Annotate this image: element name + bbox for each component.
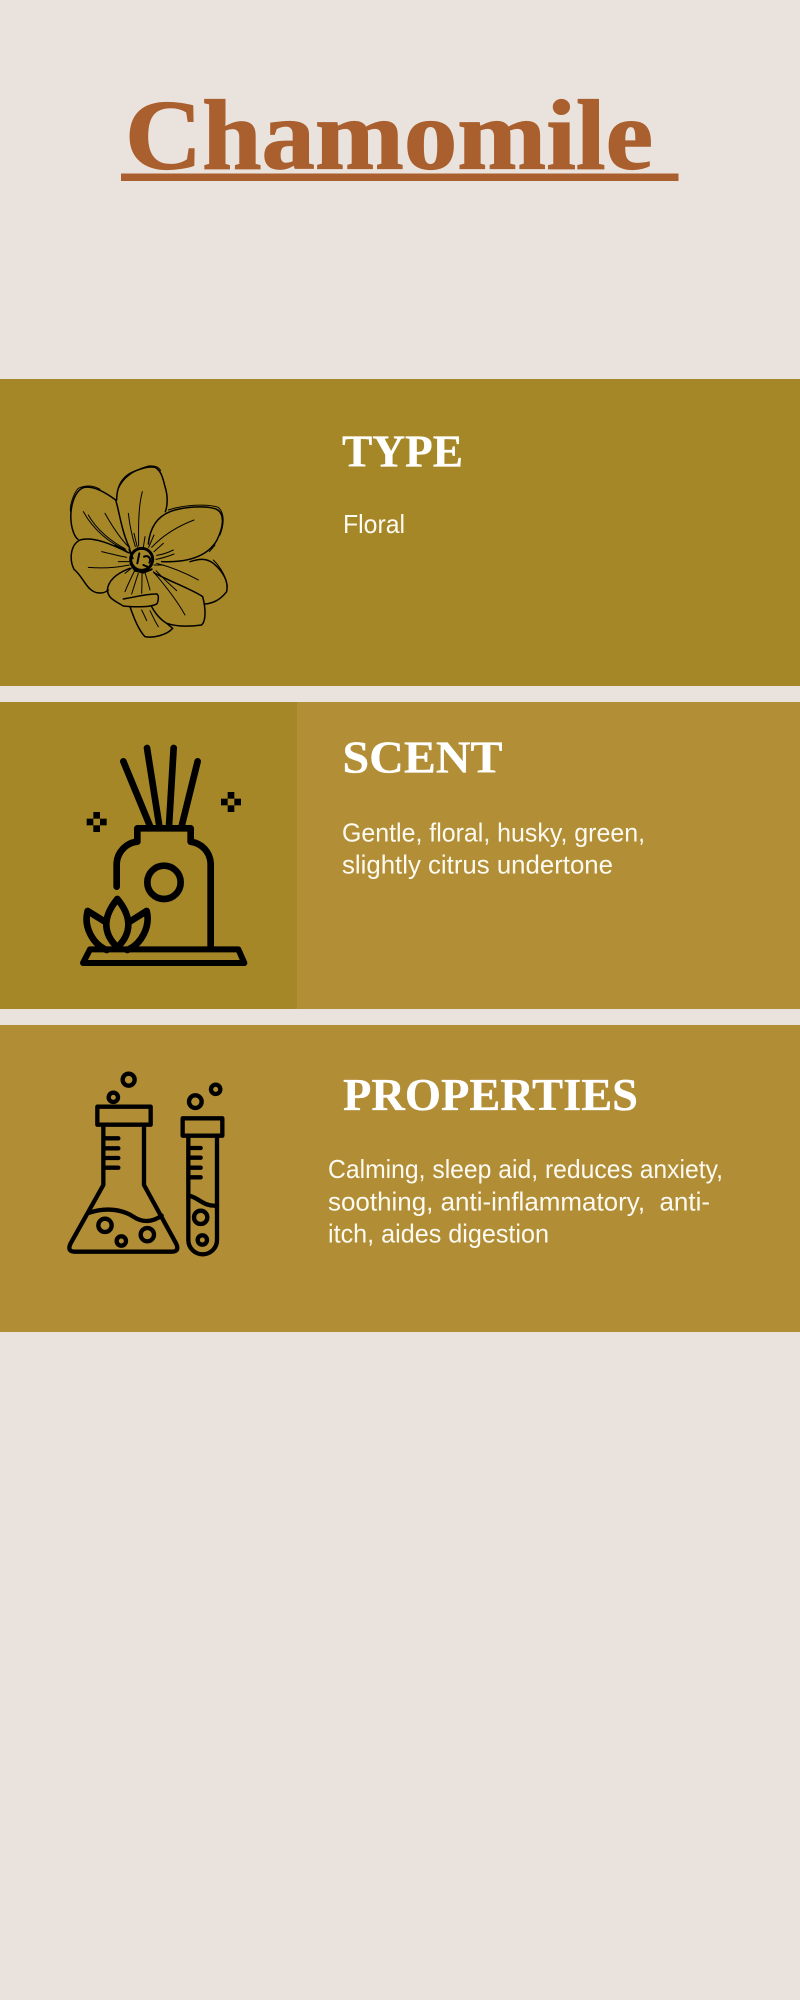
heading: scent: SCENT [342,732,502,782]
text: scent description: Gentle, floral, husky, green, [342,818,645,848]
title: Chamomile [125,80,653,190]
panel: scent icon background [0,702,297,1009]
text: properties description: soothing, anti-inflammatory, anti- [328,1186,710,1216]
icon: laboratory flask and test tube [69,1074,222,1254]
panel: properties [0,1025,800,1332]
text: properties description [328,1154,723,1248]
icon: flower [70,466,227,637]
panel: scent [0,702,800,1009]
heading: properties: PROPERTIES [343,1069,638,1120]
text: scent description: slightly citrus undertone [342,850,613,880]
icon: reed diffuser [83,748,244,963]
text: scent description [342,818,645,880]
text: properties description: Calming, sleep aid, reduces anxiety, [328,1154,723,1184]
panel: type [0,379,800,686]
text: type description: Floral [343,509,405,539]
heading: type: TYPE [342,426,463,476]
text: properties description: itch, aides digestion [328,1218,549,1248]
